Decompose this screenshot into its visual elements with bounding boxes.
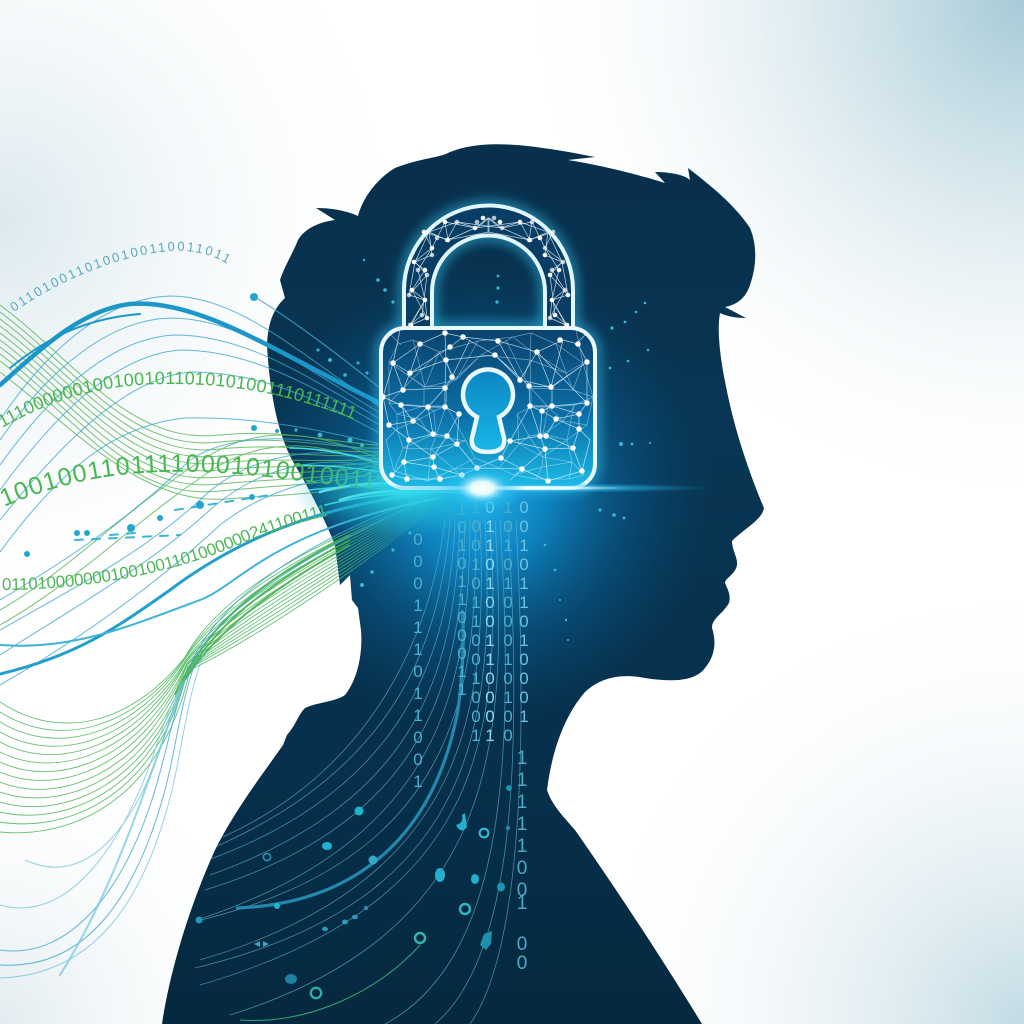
binary column 5: 1010100010100 (498, 498, 518, 745)
thin fan lines running down into the shoulders (195, 520, 521, 1024)
network mesh in the shackle (411, 218, 568, 325)
glow and streams inside the head (195, 258, 681, 1024)
binary column 6: 001011010001 (514, 498, 534, 726)
vertical binary columns falling from the lock (408, 498, 534, 972)
radial data dashes around the lock (294, 259, 651, 641)
thick stream into the shoulder (236, 610, 463, 908)
mesh layer (383, 330, 590, 481)
green wave band descending from the left (0, 305, 385, 625)
mirrored shackle nodes (409, 218, 566, 325)
thick blue wave ribbons (0, 304, 470, 975)
thin blue wave lines (0, 296, 430, 978)
shoulder nodes and rings (196, 785, 512, 998)
cyan wash behind the lock base (290, 442, 520, 538)
binary stream: arc at the top: 0110100110100100110011011 (10, 242, 230, 311)
binary column 7: 1111100 (512, 748, 532, 902)
lock shackle (404, 206, 573, 328)
binary column 4: 0110100110001 (480, 498, 500, 745)
binary stream: lower green: 0110100000001001001101000000241100111 (2, 505, 328, 590)
head silhouette (162, 144, 764, 1024)
binary stream: upper green: 1110000001001001011010101001110111111 (0, 372, 355, 428)
horizontal lens flare (345, 483, 715, 493)
green fan band rising from the lower left (0, 499, 430, 833)
flash core (438, 462, 526, 514)
mirrored mesh layer (386, 330, 593, 481)
network mesh and nodes in the body (383, 330, 593, 481)
binary column 3: 1001011001001 (466, 498, 486, 745)
network nodes in the shackle (411, 218, 568, 325)
node layer (383, 333, 587, 481)
keyhole (463, 370, 513, 452)
scattered data dots on waves (24, 293, 279, 557)
binary column 2: 10101100011 (452, 500, 472, 698)
binary column 9: 00 (512, 934, 532, 972)
light flash at the base of the lock (345, 462, 715, 514)
mirrored shackle mesh (409, 218, 566, 325)
green fade line (240, 945, 420, 1020)
binary column 1: 000111011001 (408, 530, 428, 794)
curved binary text streams on the left (0, 242, 387, 590)
blue glow around the lock (282, 294, 681, 698)
padlock built from a glowing network (381, 206, 595, 488)
lock outer glow (381, 206, 595, 488)
binary column 8: 1 (512, 893, 532, 916)
lock body (381, 328, 595, 488)
